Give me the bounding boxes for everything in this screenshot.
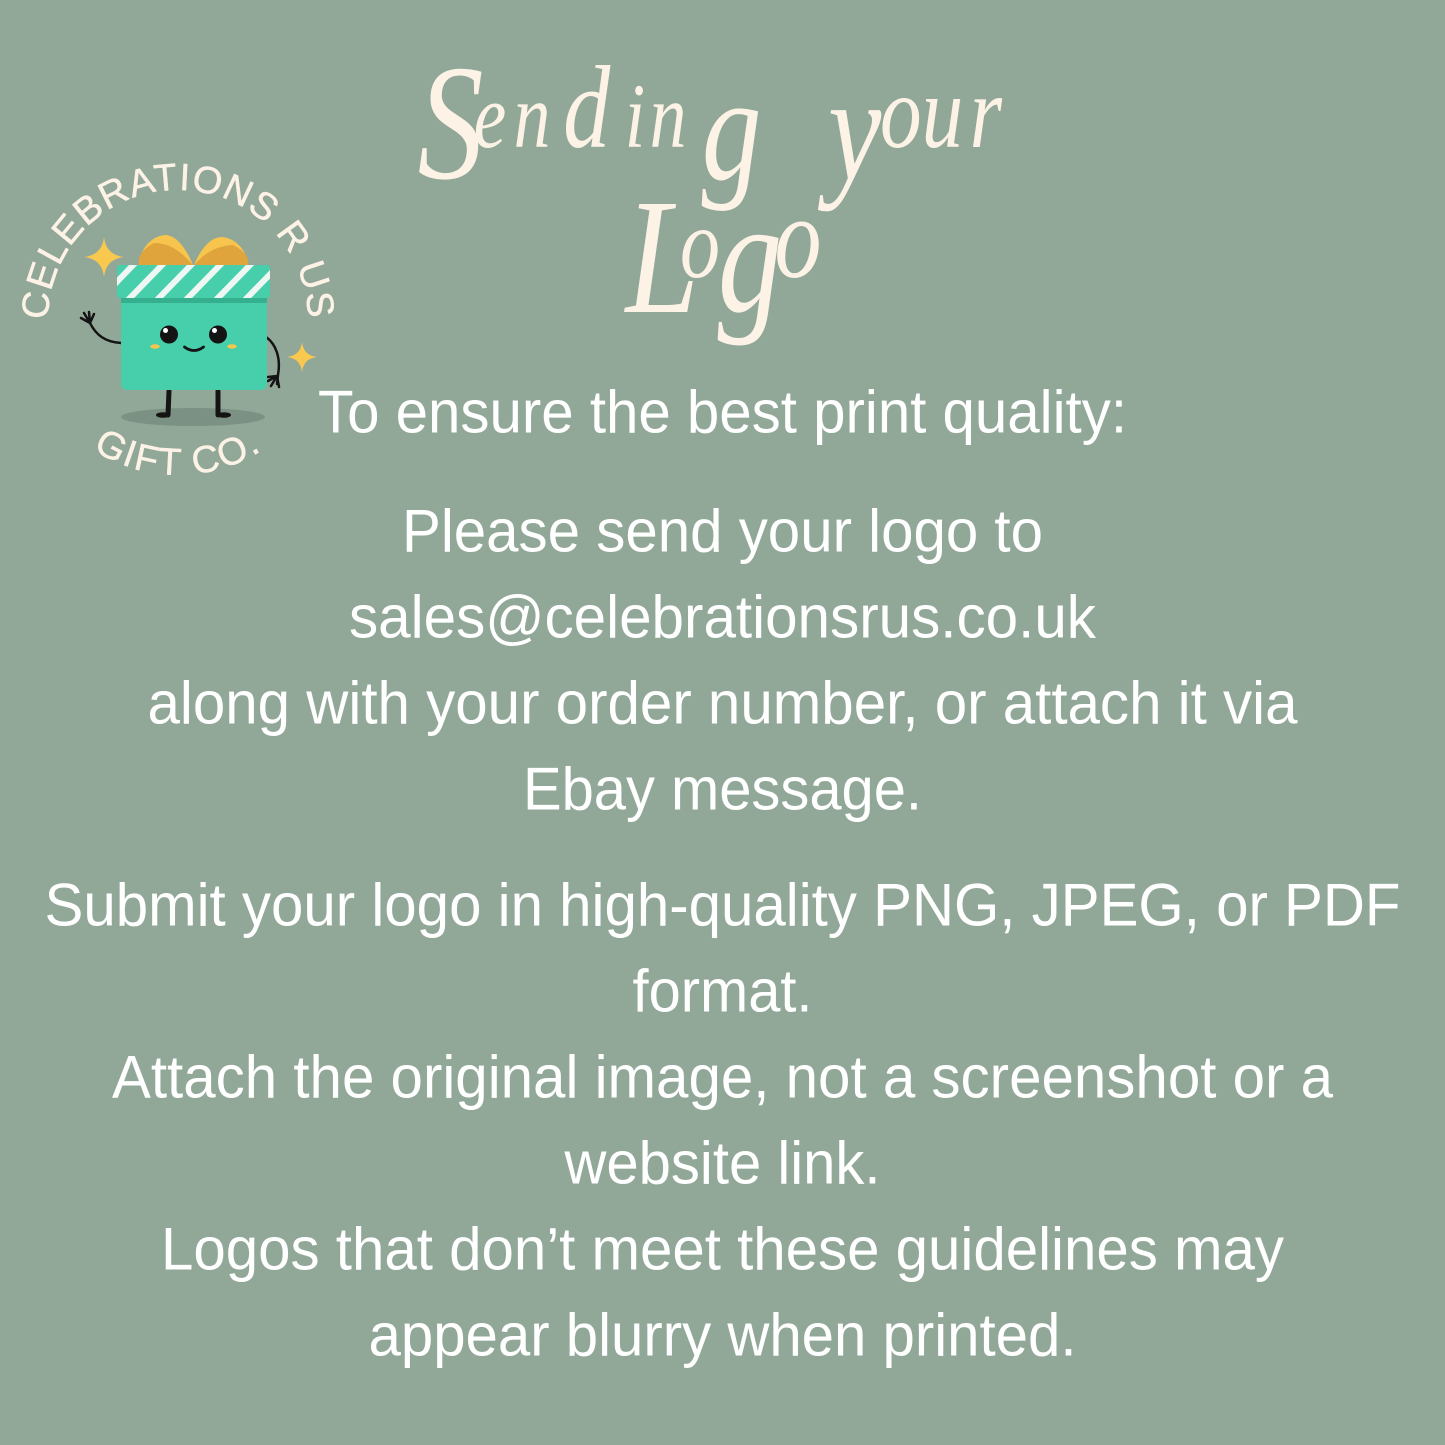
shadow <box>121 408 265 426</box>
title: d <box>563 43 611 174</box>
title: g <box>718 166 782 346</box>
icon: sparkle right <box>287 342 317 372</box>
logo: Celebrations R Us Gift Co. <box>22 163 334 475</box>
title: in <box>625 66 686 168</box>
title: y <box>817 46 882 212</box>
title: L <box>624 166 699 348</box>
text block: format guidelines: appear blurry when printed. <box>368 1300 1076 1368</box>
face <box>160 326 178 344</box>
title <box>418 32 1002 348</box>
text block: how to send: Ebay message. <box>523 754 922 822</box>
legs <box>168 391 218 415</box>
text block: format guidelines: Logos that don’t meet these guidelines may <box>161 1214 1285 1282</box>
icon: gift character <box>81 235 282 426</box>
text block: format guidelines: Submit your logo in high-quality PNG, JPEG, or PDF <box>44 870 1400 938</box>
text block: how to send: along with your order number, or attach it via <box>148 668 1298 736</box>
logo arc text: top: CELEBRATIONS R US <box>22 163 334 317</box>
bow <box>139 235 193 265</box>
box body <box>121 290 267 390</box>
title: o <box>680 188 720 299</box>
title: en <box>474 66 550 168</box>
title: our <box>880 55 1002 170</box>
title: o <box>774 173 822 304</box>
text block: format guidelines: Attach the original image, not a screenshot or a <box>112 1042 1333 1110</box>
text block: how to send: sales@celebrationsrus.co.uk <box>349 582 1097 650</box>
arms <box>81 312 279 387</box>
box lid <box>117 265 270 298</box>
title: g <box>702 46 762 212</box>
text block: format guidelines: website link. <box>564 1128 880 1196</box>
title: S <box>418 32 484 214</box>
text block: format guidelines: format. <box>632 956 812 1024</box>
text block: format guidelines <box>44 870 1400 1368</box>
text block: how to send <box>148 496 1298 822</box>
icon: sparkle left <box>84 237 124 277</box>
logo arc text: bottom: GIFT CO. <box>98 432 259 475</box>
text block: how to send: Please send your logo to <box>402 496 1043 564</box>
text block: intro: To ensure the best print quality: <box>318 378 1127 446</box>
